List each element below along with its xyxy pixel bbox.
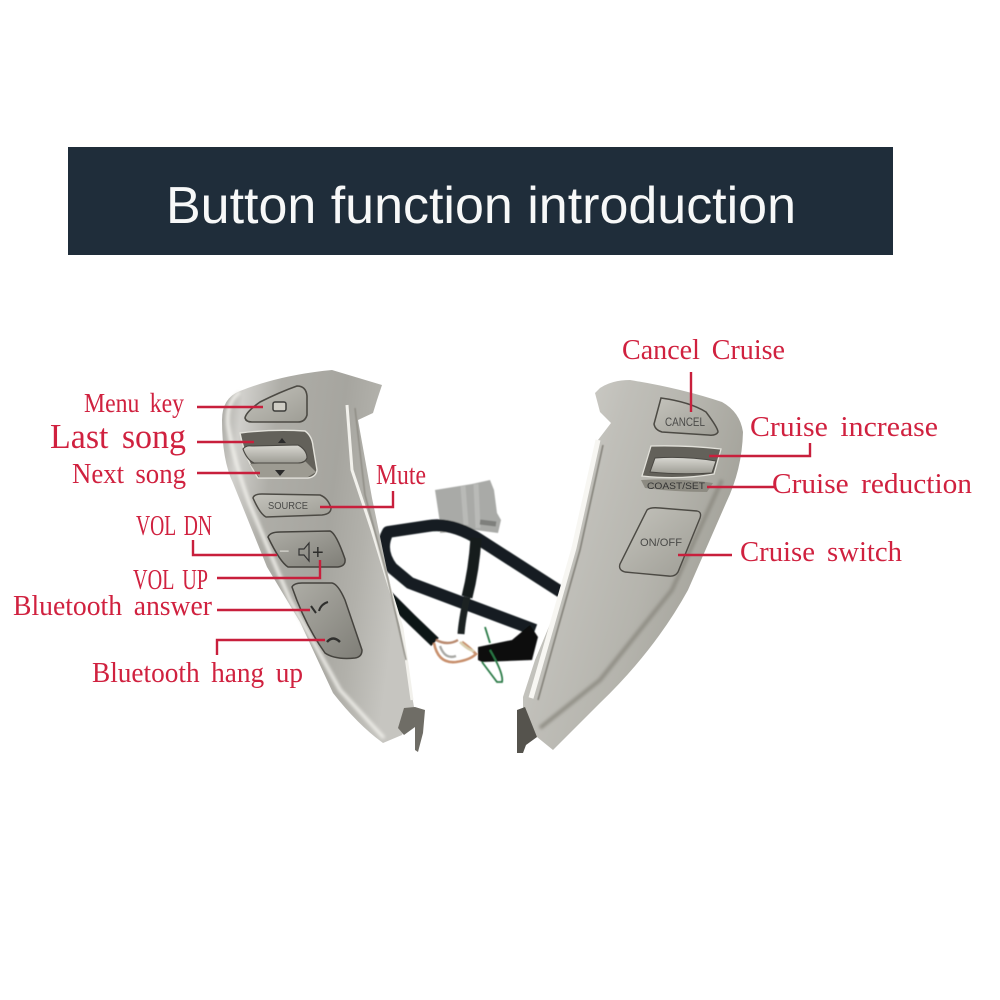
label: vol up: VOL UP xyxy=(133,564,208,596)
panel edge highlights xyxy=(228,392,425,752)
label: menu key: Menu key xyxy=(84,388,184,418)
button: source: SOURCE xyxy=(268,500,308,512)
right switch panel xyxy=(517,380,743,753)
title: Button function introduction xyxy=(166,177,796,235)
label: cruise increase: Cruise increase xyxy=(750,411,938,443)
button: cancel: CANCEL xyxy=(665,417,706,429)
button: volume xyxy=(268,531,345,567)
wiring harness xyxy=(384,480,561,682)
label: vol dn: VOL DN xyxy=(136,510,212,542)
button: phone xyxy=(292,583,362,658)
button: on off: ON/OFF xyxy=(640,537,682,549)
connector plug xyxy=(435,480,501,533)
label: last song: Last song xyxy=(50,417,186,456)
leader lines xyxy=(193,372,810,655)
button: coast set: COAST/SET xyxy=(647,481,705,492)
label: cruise reduction: Cruise reduction xyxy=(772,468,973,500)
button: on off xyxy=(620,508,701,576)
label: cancel cruise: Cancel Cruise xyxy=(622,334,785,366)
label: cruise switch: Cruise switch xyxy=(740,536,902,568)
label: mute: Mute xyxy=(376,459,426,491)
button: source xyxy=(253,494,331,517)
label: next song: Next song xyxy=(72,458,186,490)
label: bluetooth answer: Bluetooth answer xyxy=(13,590,212,622)
button: cancel xyxy=(654,398,718,435)
button: menu xyxy=(245,386,307,422)
button: cruise rocker xyxy=(642,446,721,478)
button: track rocker xyxy=(240,430,317,478)
button: coast set xyxy=(641,479,713,492)
button: volume: + xyxy=(312,542,324,564)
label: bluetooth hang up: Bluetooth hang up xyxy=(92,657,303,689)
labels xyxy=(13,334,973,689)
button: volume: − xyxy=(279,541,290,561)
title banner xyxy=(68,147,893,255)
left switch panel xyxy=(222,370,425,752)
panel edge highlights xyxy=(517,440,722,753)
